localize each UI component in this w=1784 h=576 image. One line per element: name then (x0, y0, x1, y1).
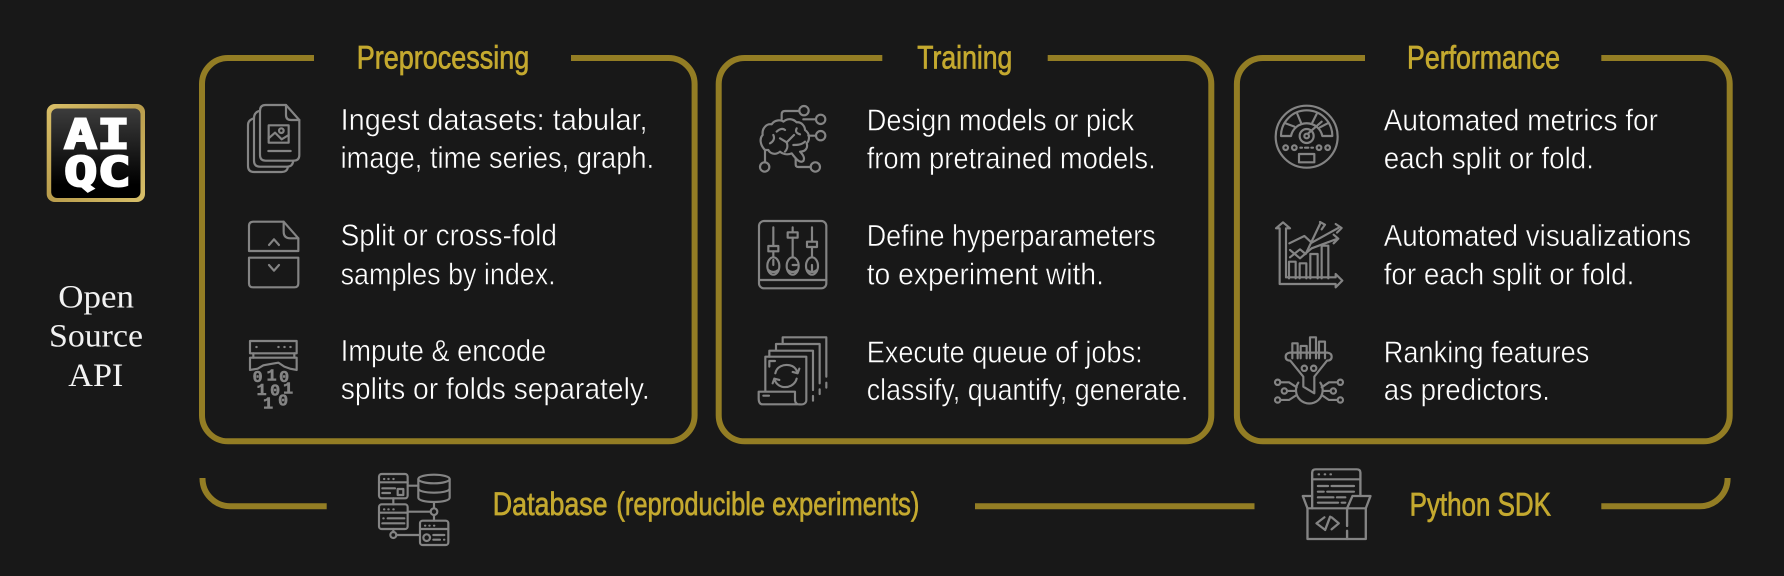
text: Open Source API: Open (58, 279, 134, 315)
heading: Preprocessing: Preprocessing (357, 39, 529, 75)
text: ranking features: Ranking features (1384, 334, 1589, 369)
heading: Training: Training (917, 39, 1012, 75)
panel frame: Performance (1237, 58, 1730, 441)
text: execute queue: Execute queue of jobs: (867, 334, 1143, 369)
text: Open Source API: Source (49, 319, 143, 355)
text: design models (867, 103, 1156, 175)
logo: AIQC: AI (64, 110, 130, 158)
text: automated metrics: each split or fold. (1384, 140, 1594, 175)
icon: binary shredder: 0 (270, 382, 280, 402)
icon: speedometer (1276, 106, 1338, 168)
panel: Performance (1237, 39, 1730, 441)
text: impute and encode: Impute & encode (341, 333, 546, 368)
text: impute and encode (341, 333, 650, 406)
icon: database schema (379, 474, 450, 545)
icon: feature funnel (1275, 337, 1343, 404)
logo: AIQC: QC (64, 148, 131, 196)
text: define hyperparameters: Define hyperparameters (867, 218, 1156, 253)
text: Open Source API (49, 279, 143, 394)
text: impute and encode: splits or folds separately. (341, 371, 650, 406)
icon: binary shredder: 0 (252, 369, 263, 388)
bottom bracket: left (202, 478, 327, 506)
logo: AIQC (47, 104, 145, 202)
panel: Training (719, 39, 1211, 441)
label: Database (493, 486, 919, 522)
text: execute queue (867, 334, 1188, 407)
icon: python sdk box (1303, 469, 1370, 539)
icon: hyperparameter sliders (759, 221, 826, 288)
text: Open Source API: API (68, 358, 123, 394)
text: split samples (341, 218, 557, 292)
bottom bracket: right (1601, 478, 1728, 506)
panel: Preprocessing (202, 39, 695, 441)
text: design models: Design models or pick (867, 103, 1135, 138)
icon: neural brain (760, 106, 825, 172)
text: automated visualizations: Automated visualizations (1384, 218, 1691, 253)
text: design models: from pretrained models. (867, 140, 1156, 175)
icon: split file (249, 222, 298, 287)
icon: stacked image documents (248, 105, 299, 172)
icon: binary shredder: 1 (263, 396, 273, 414)
icon: binary shredder (250, 341, 297, 414)
icon: binary shredder: 0 (279, 369, 289, 388)
label: Python SDK: Python SDK (1410, 487, 1551, 523)
icon: binary shredder: 0 (278, 392, 288, 412)
bottom bracket: middle line (975, 503, 1254, 509)
text: define hyperparameters: to experiment with. (867, 257, 1104, 292)
icon: binary shredder: 1 (283, 380, 293, 400)
text: ranking features: as predictors. (1384, 372, 1550, 407)
panel frame: Training (719, 58, 1211, 441)
icon: binary shredder: 1 (266, 368, 277, 386)
text: split samples: Split or cross-fold (341, 218, 557, 253)
text: ranking features (1384, 334, 1589, 407)
panel frame: Preprocessing (202, 58, 695, 441)
label: Database: Database (493, 486, 608, 522)
heading: Performance: Performance (1407, 39, 1560, 75)
icon: chart with trend arrows (1276, 222, 1342, 287)
text: automated metrics: Automated metrics for (1384, 103, 1658, 138)
icon: job queue (759, 337, 826, 404)
text: execute queue: classify, quantify, generate. (867, 372, 1188, 407)
icon: binary shredder: 1 (256, 382, 267, 401)
label: Database: (reproducible experiments) (616, 486, 919, 522)
text: automated visualizations: for each split or fold. (1384, 257, 1634, 292)
text: split samples: samples by index. (341, 257, 556, 292)
text: ingest datasets: Ingest datasets: tabular, (341, 102, 648, 137)
text: define hyperparameters (867, 218, 1156, 292)
text: ingest datasets: image, time series, graph. (341, 140, 654, 175)
text: automated metrics (1384, 103, 1658, 175)
text: automated visualizations (1384, 218, 1691, 292)
text: ingest datasets (341, 102, 654, 175)
